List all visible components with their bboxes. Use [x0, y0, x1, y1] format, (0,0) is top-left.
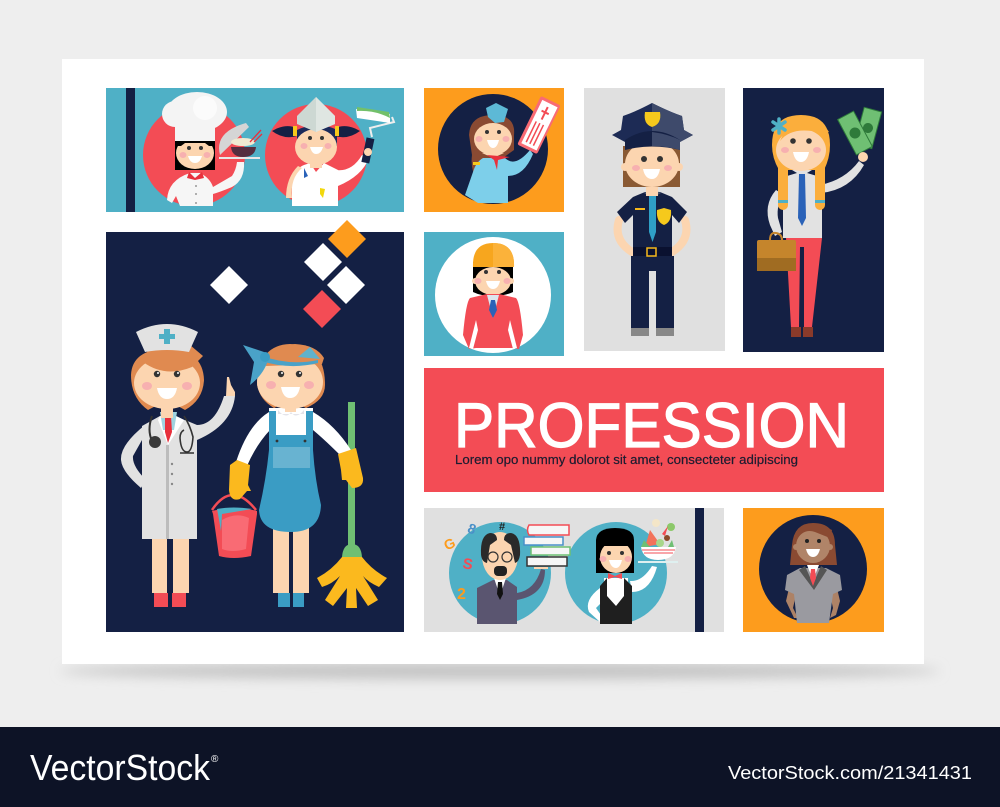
painter: [272, 97, 394, 206]
card shadow: [60, 663, 940, 679]
teacher: 8: [466, 520, 479, 538]
decorative diamonds: [210, 220, 366, 328]
panel: police officer: [584, 88, 725, 351]
teacher: #: [499, 521, 505, 533]
subtitle: Lorem opo nummy dolorot sit amet, consecteter adipiscing: [455, 453, 798, 467]
nurse / doctor figure: [121, 324, 235, 607]
teacher: [441, 520, 570, 624]
cleaner figure with bucket and mop: [212, 344, 387, 608]
chef: [162, 92, 262, 206]
title: PROFESSION: [454, 391, 849, 461]
watermark bar: [0, 727, 1000, 807]
floating letters: G: [441, 534, 458, 553]
teacher: S: [461, 555, 474, 574]
panel: large navy background: [106, 232, 404, 632]
mop: [317, 402, 387, 608]
panel: title banner: [424, 368, 884, 492]
panel: businesswoman with money and briefcase: [743, 88, 884, 352]
brand name: VectorStock: [30, 747, 211, 788]
teacher: 2: [457, 586, 466, 603]
image url: VectorStock.com/21341431: [728, 763, 972, 783]
registered mark: ®: [211, 754, 219, 765]
panel: chef and painter: [106, 88, 404, 212]
bucket: [212, 495, 257, 558]
white card: [62, 59, 924, 664]
waiter: [588, 519, 678, 624]
panel: construction worker: [424, 232, 564, 356]
panel: flight attendant: [424, 88, 564, 212]
panel: office worker: [743, 508, 884, 632]
panel: teacher and waiter: [424, 508, 724, 632]
